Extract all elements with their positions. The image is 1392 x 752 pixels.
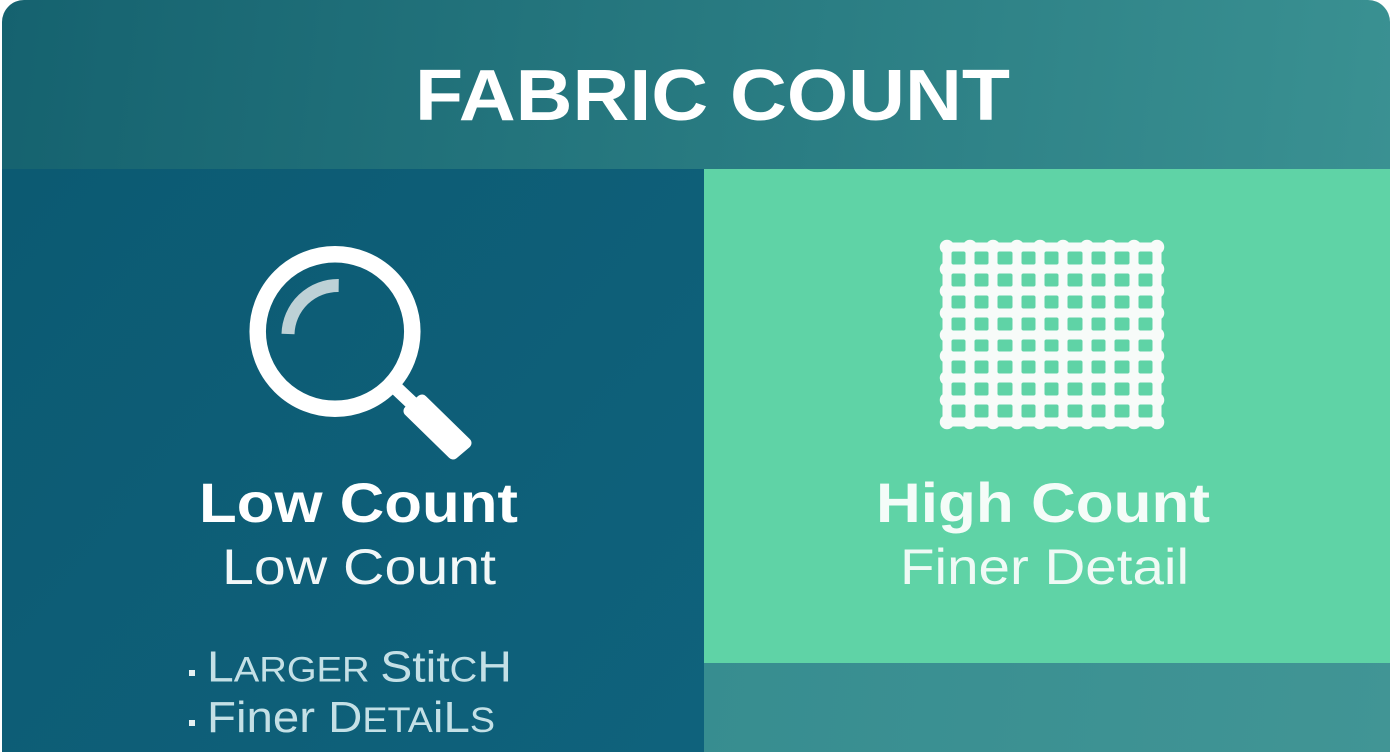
panel: low count <box>0 169 704 752</box>
list item: larger stitch: LARGER StitCH <box>207 642 512 692</box>
subheading: finer detail: Finer Detail <box>900 539 1189 595</box>
panel: header band <box>0 0 1392 169</box>
icon: magnifying glass <box>258 254 466 454</box>
list item: finer details: Finer D ETAiLS <box>207 693 495 742</box>
list: low count features <box>189 642 512 742</box>
title: FABRIC COUNT <box>415 56 1010 136</box>
panel: bottom right band <box>704 663 1392 752</box>
panel: high count <box>704 169 1392 663</box>
heading: low count: Low Count <box>199 471 518 534</box>
icon: dense fabric weave <box>947 247 1157 422</box>
subheading: low count: Low Count <box>222 539 496 595</box>
heading: high count: High Count <box>876 471 1210 534</box>
